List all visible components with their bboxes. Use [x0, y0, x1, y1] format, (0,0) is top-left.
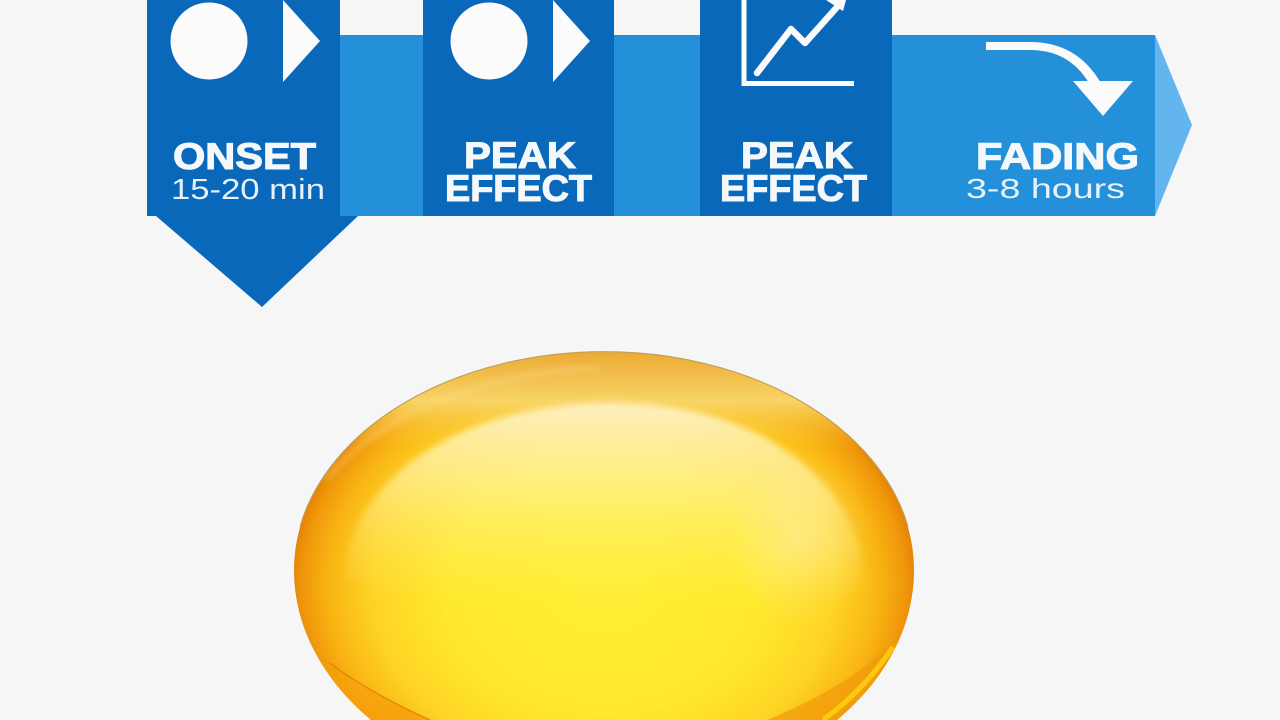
- peak heading line 2: EFFECT: [720, 168, 867, 209]
- onset heading: ONSET: [173, 136, 316, 177]
- bar body: [340, 35, 1155, 216]
- capsule body: [294, 352, 914, 720]
- icon: play triangle: [283, 0, 320, 82]
- capsule top rim: [354, 352, 854, 442]
- icon: circle: [450, 2, 528, 80]
- icon: curved down arrow: [986, 42, 1133, 116]
- panel: peak effect 2: [700, 0, 892, 216]
- panel: onset: [147, 0, 358, 307]
- peak heading line 2: EFFECT: [445, 168, 592, 209]
- panel: fading: [966, 42, 1139, 204]
- panel: peak effect 1: [423, 0, 614, 216]
- peak banner: [423, 0, 614, 216]
- capsule highlight: [346, 398, 864, 581]
- peak heading line 1: PEAK: [464, 135, 576, 176]
- capsule edge: [300, 352, 908, 527]
- onset banner: [147, 0, 358, 307]
- bar arrow tip: [1155, 35, 1192, 216]
- fading heading: FADING: [976, 136, 1139, 177]
- timeline bar: [340, 35, 1192, 216]
- capsule side glow: [742, 468, 862, 614]
- icon: play triangle: [553, 0, 590, 82]
- fading duration: 3-8 hours: [966, 173, 1125, 204]
- peak banner: [700, 0, 892, 216]
- onset duration: 15-20 min: [171, 174, 325, 206]
- capsule top left reflection: [325, 368, 600, 480]
- icon: circle: [170, 2, 248, 80]
- peak heading line 1: PEAK: [741, 135, 853, 176]
- softgel capsule: [294, 352, 914, 720]
- capsule lower seam: [321, 663, 428, 720]
- icon: line chart: [744, 0, 854, 84]
